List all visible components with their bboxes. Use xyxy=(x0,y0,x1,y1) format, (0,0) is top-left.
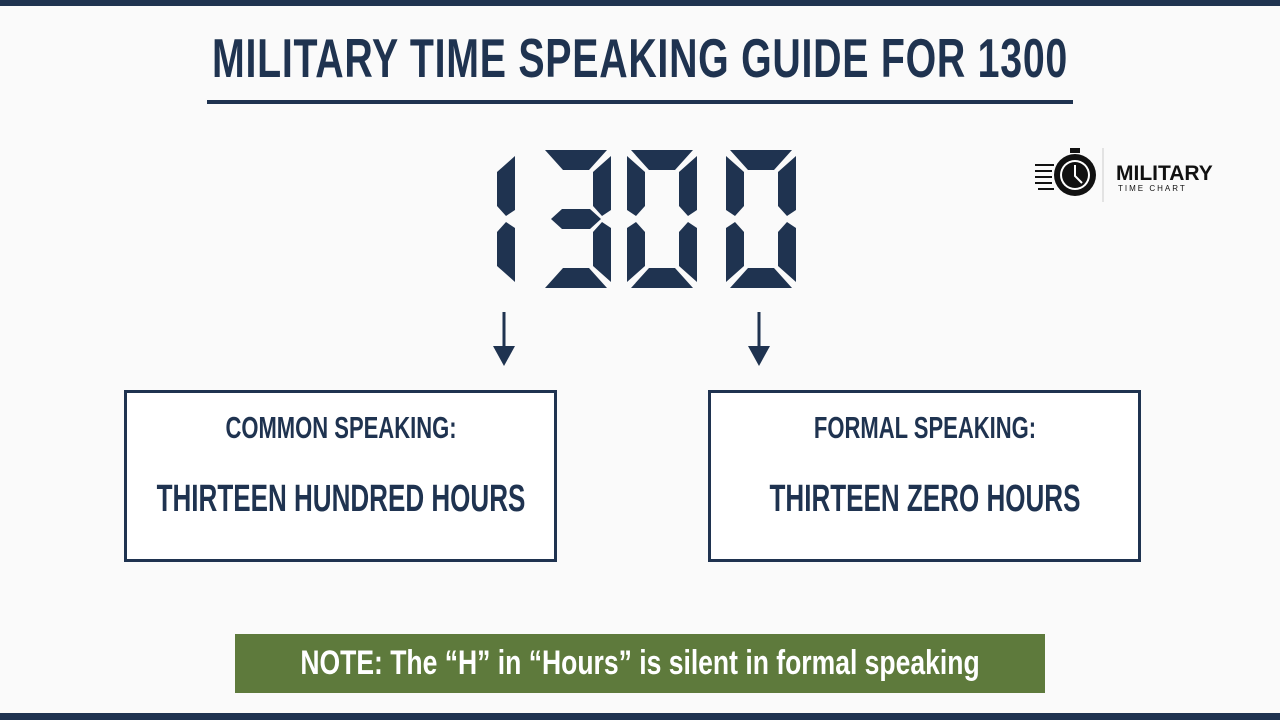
logo xyxy=(1035,148,1213,202)
logo: MILITARY xyxy=(1116,162,1213,185)
value: THIRTEEN ZERO HOURS xyxy=(769,478,1080,520)
note bar: NOTE: The “H” in “Hours” is silent in formal speaking xyxy=(300,644,980,682)
panel: common speaking xyxy=(124,390,557,562)
panel: formal speaking xyxy=(708,390,1141,562)
arrow right xyxy=(748,312,770,366)
note bar xyxy=(235,634,1045,693)
digital number 1300 xyxy=(497,150,796,288)
arrow left xyxy=(493,312,515,366)
label: FORMAL SPEAKING: xyxy=(813,410,1036,445)
label: COMMON SPEAKING: xyxy=(225,410,456,445)
logo: TIME CHART xyxy=(1118,184,1187,193)
value: THIRTEEN HUNDRED HOURS xyxy=(156,478,525,520)
title: MILITARY TIME SPEAKING GUIDE FOR 1300 xyxy=(212,27,1068,89)
